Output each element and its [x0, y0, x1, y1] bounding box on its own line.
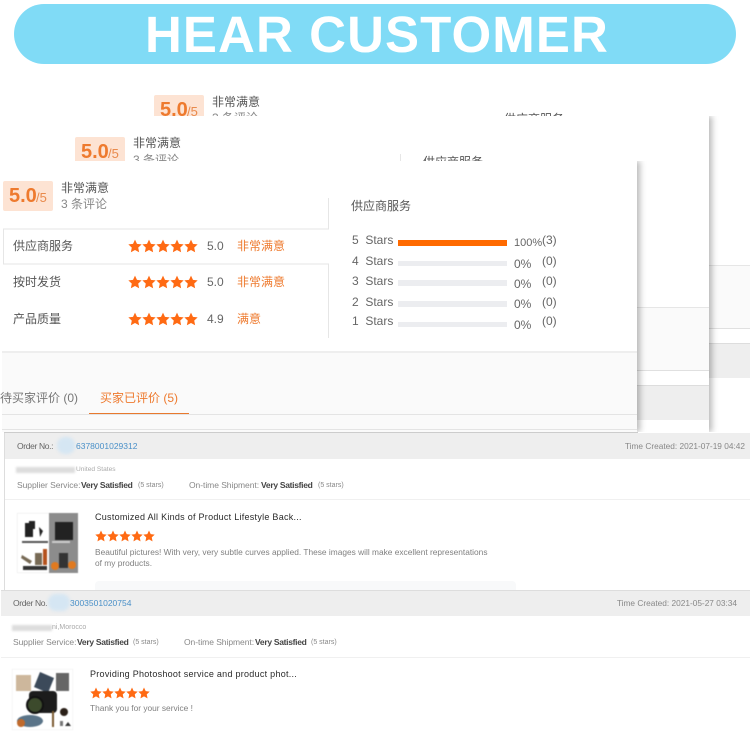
- rating score: /5: [36, 190, 47, 205]
- supplier service heading: 供应商服务: [504, 112, 564, 126]
- tab area: [2, 351, 637, 434]
- shipment value: Very Satisfied: [255, 637, 307, 647]
- score: 5.0: [207, 275, 224, 289]
- label 3 stars: 3 Stars: [352, 274, 393, 288]
- bar 4 stars: [398, 261, 507, 266]
- score: 5.0: [207, 239, 224, 253]
- rating score: 5.0: [81, 141, 109, 163]
- title: HEAR CUSTOMER: [145, 6, 609, 63]
- grey tab strip: [637, 385, 709, 420]
- supplier stars: (5 stars): [133, 639, 159, 646]
- order number: 3003501020754: [70, 598, 131, 608]
- product thumbnail: [16, 672, 72, 728]
- rating score: /5: [108, 146, 119, 161]
- rating score: [3, 181, 53, 211]
- service rating line: [13, 637, 337, 647]
- product thumbnail: [17, 512, 79, 574]
- count 3 stars: (0): [542, 274, 557, 288]
- shipment label: On-time Shipment:: [189, 480, 259, 490]
- redacted buyer name: [16, 467, 75, 473]
- redacted prefix: [48, 594, 70, 611]
- label 4 stars: 4 Stars: [352, 254, 393, 268]
- redacted buyer name: [12, 625, 52, 631]
- review stars: [90, 688, 150, 698]
- score table outline: [3, 198, 329, 338]
- review stars: [95, 530, 155, 542]
- satisfaction label: 非常满意: [133, 136, 181, 150]
- order label: Order No.:: [17, 441, 53, 451]
- shipment value: Very Satisfied: [261, 480, 313, 490]
- rating score: [75, 137, 125, 161]
- satisfaction label: 非常满意: [61, 181, 109, 195]
- label: 按时发货: [13, 275, 61, 289]
- rating score: [154, 95, 204, 125]
- tab underline: [89, 413, 189, 414]
- service rating line: [17, 480, 344, 490]
- satisfaction label: 非常满意: [212, 95, 260, 109]
- value 1 star: 0%: [514, 318, 531, 332]
- bar 3 stars: [398, 280, 507, 286]
- bar 1 star: [398, 322, 507, 327]
- shipment label: On-time Shipment:: [184, 637, 254, 647]
- time created: Time Created: 2021-05-27 03:34: [617, 598, 737, 608]
- shipment stars: (5 stars): [318, 482, 344, 489]
- rating score: /5: [187, 104, 198, 119]
- score: 4.9: [207, 312, 224, 326]
- order header: [5, 433, 750, 459]
- tab: awaiting buyer reviews: 待买家评价 (0): [0, 391, 78, 405]
- label 2 stars: 2 Stars: [352, 295, 393, 309]
- supplier value: Very Satisfied: [77, 637, 129, 647]
- panel: middle review summary: [0, 116, 709, 432]
- label: 供应商服务: [13, 239, 73, 253]
- review text: [95, 547, 488, 568]
- order label: Order No.: [13, 598, 47, 608]
- reply box: [95, 581, 516, 593]
- verdict: 非常满意: [237, 239, 285, 253]
- count 5 stars: (3): [542, 233, 557, 247]
- panel: order review 1: [0, 432, 750, 590]
- label 1 star: 1 Stars: [352, 314, 393, 328]
- review count: 3 条评论: [61, 197, 107, 211]
- value 3 stars: 0%: [514, 277, 531, 291]
- order header: [1, 590, 750, 616]
- five stars: [128, 240, 198, 252]
- grey band: [637, 307, 709, 371]
- product title: Customized All Kinds of Product Lifestyle Back...: [95, 512, 302, 522]
- row: supplier service: [13, 240, 284, 252]
- row: product quality: [14, 312, 260, 326]
- title banner: [14, 4, 736, 64]
- rating score: 5.0: [9, 185, 37, 207]
- grey tab strip: [0, 343, 750, 378]
- five stars: [128, 312, 198, 326]
- count 4 stars: (0): [542, 254, 557, 268]
- order number: 6378001029312: [76, 441, 137, 451]
- vertical divider: [400, 154, 401, 161]
- redacted prefix: [57, 437, 75, 454]
- time created: Time Created: 2021-07-19 04:42: [625, 441, 745, 451]
- review text: Beautiful pictures! With very, very subtle curves applied. These images will make excellent representations: [95, 547, 488, 557]
- supplier label: Supplier Service:: [17, 480, 80, 490]
- divider: [5, 499, 750, 500]
- review text: of my products.: [95, 558, 152, 568]
- shipment stars: (5 stars): [311, 639, 337, 646]
- review text: Thank you for your service !: [90, 703, 193, 713]
- panel: back review summary: [0, 85, 750, 432]
- bar chart: star distribution: [352, 236, 556, 329]
- count 2 stars: (0): [542, 295, 557, 309]
- lower rule: [2, 429, 637, 430]
- card left edge: [4, 433, 5, 590]
- supplier value: Very Satisfied: [81, 480, 133, 490]
- panel: order review 2: [0, 590, 750, 750]
- supplier stars: (5 stars): [138, 482, 164, 489]
- buyer country: ni,Morocco: [52, 624, 86, 631]
- card top edge: [4, 432, 638, 433]
- rating score: 5.0: [160, 99, 188, 121]
- verdict: 非常满意: [237, 275, 285, 289]
- bar 2 stars: [398, 301, 507, 307]
- review count: 3 条评论: [212, 111, 258, 125]
- supplier label: Supplier Service:: [13, 637, 76, 647]
- five stars: [128, 276, 198, 288]
- label: 产品质量: [13, 312, 61, 326]
- tab baseline: [2, 414, 637, 415]
- product title: Providing Photoshoot service and product phot...: [90, 669, 297, 679]
- supplier service heading: 供应商服务: [423, 155, 483, 169]
- verdict: 满意: [237, 312, 261, 326]
- divider: [1, 657, 750, 658]
- label 5 stars: 5 Stars: [352, 233, 393, 247]
- supplier service heading: 供应商服务: [351, 199, 411, 213]
- value 5 stars: 100%: [514, 237, 542, 249]
- value 2 stars: 0%: [514, 297, 531, 311]
- buyer country: United States: [76, 466, 116, 473]
- bar 5 stars: [398, 240, 507, 246]
- value 4 stars: 0%: [514, 257, 531, 271]
- review count: 3 条评论: [133, 153, 179, 167]
- count 1 star: (0): [542, 314, 557, 328]
- row: on-time shipment: [13, 276, 284, 288]
- tab: buyer reviewed: 买家已评价 (5): [100, 391, 178, 405]
- panel: front review summary: [0, 161, 637, 432]
- grey band: [0, 265, 750, 329]
